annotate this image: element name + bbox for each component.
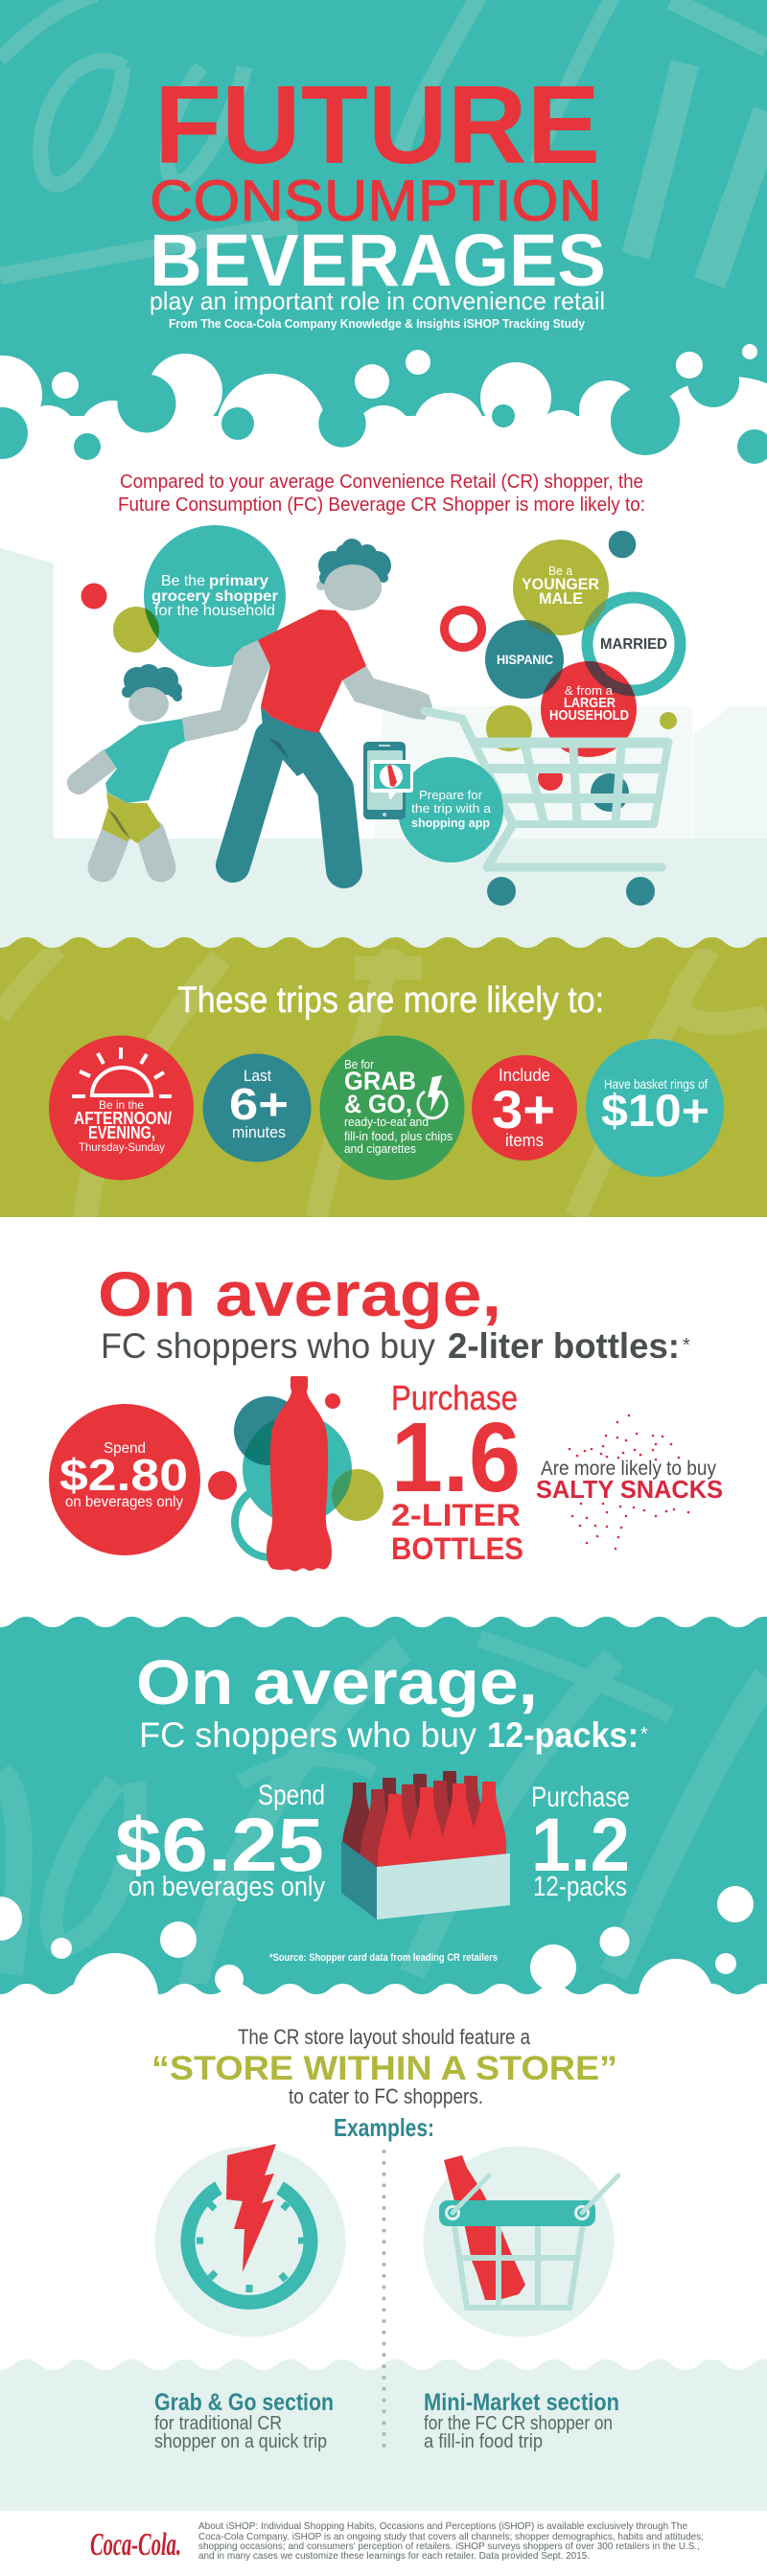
panel: shopper scene background bbox=[0, 460, 767, 949]
source note: *Source: Shopper card data from leading CR retailers bbox=[269, 1952, 498, 1964]
stat circle: afternoon evening: Be in the bbox=[99, 1098, 144, 1112]
panel: trips background bbox=[0, 937, 767, 1217]
icon: sun bbox=[72, 1047, 172, 1096]
heading: on average two liter bbox=[98, 1258, 690, 1366]
stat circle: grab and go: & GO, bbox=[344, 1090, 412, 1118]
callout: primary grocery shopper bbox=[144, 525, 286, 667]
icon: stopwatch bolt bbox=[418, 1075, 447, 1118]
heading: on average twelve packs: * bbox=[640, 1724, 648, 1745]
stat circle: afternoon evening bbox=[49, 1035, 194, 1181]
icon: twelve pack box bbox=[341, 1771, 510, 1920]
callout: larger household: & from a bbox=[565, 683, 614, 698]
panel: twelve pack background bbox=[0, 1617, 767, 1994]
stat: purchase 1.2 bbox=[531, 1782, 630, 1902]
text block: about ishop: and in many cases we customize these learnings for each retailer. Data provided Sept. 2015. bbox=[198, 2551, 590, 2562]
callout: larger household: HOUSEHOLD bbox=[549, 708, 629, 724]
text block: mini market section: a fill-in food trip bbox=[424, 2431, 543, 2452]
text block: about ishop: shopping occasions; and consumers' perception of retailers. iSHOP surveys shoppers of over 300 retailers in the U.S., bbox=[198, 2542, 700, 2552]
stat circle: ten dollars bbox=[586, 1039, 724, 1177]
callout: younger male: YOUNGER bbox=[522, 576, 599, 593]
callout: shopping app: the trip with a bbox=[411, 801, 492, 816]
stat: purchase 1.6: 2-LITER bbox=[391, 1498, 521, 1532]
stat circle: six minutes: Last bbox=[244, 1067, 271, 1085]
stat circle: afternoon evening: Thursday-Sunday bbox=[79, 1140, 165, 1154]
callout: larger household: LARGER bbox=[564, 696, 616, 711]
stat circle: three items bbox=[472, 1055, 577, 1161]
subheading: examples: Examples: bbox=[334, 2113, 434, 2142]
callout: married bbox=[587, 598, 681, 690]
title: future consumption beverages: FUTURE bbox=[154, 62, 600, 187]
heading: compared to your average: Future Consumption (FC) Beverage CR Shopper is more likely to: bbox=[118, 494, 645, 516]
heading: these trips: These trips are more likely to: bbox=[177, 980, 604, 1021]
panel: pale band bbox=[0, 2359, 767, 2511]
text block: about ishop: About iSHOP: Individual Shopping Habits, Occasions and Perceptions (iSHOP) is available exclusively through The bbox=[198, 2521, 687, 2532]
stat circle: spend 2.80: $2.80 bbox=[59, 1450, 188, 1500]
callout: primary grocery shopper: grocery shopper bbox=[151, 588, 278, 605]
stat: spend 6.25: on beverages only bbox=[128, 1872, 325, 1902]
stat: purchase 1.2: 1.2 bbox=[531, 1802, 630, 1887]
icon: stopwatch with lightning bbox=[155, 2144, 345, 2336]
text block: about ishop: Coca-Cola Company. iSHOP is an ongoing study that covers all channels; shopper demographics, habits and attitudes; bbox=[198, 2532, 704, 2542]
callout: primary grocery shopper: Be the bbox=[161, 573, 205, 589]
callout: married: MARRIED bbox=[600, 636, 667, 653]
decorative circles in cart bbox=[486, 705, 677, 812]
text block: grab and go section: Grab & Go section bbox=[154, 2389, 334, 2416]
stat circle: afternoon evening: EVENING, bbox=[88, 1123, 155, 1142]
decorative circles: left bbox=[81, 583, 159, 653]
stat circle: grab and go: GRAB bbox=[344, 1067, 416, 1095]
heading: compared to your average: Compared to your average Convenience Retail (CR) shopper, the bbox=[120, 472, 643, 493]
bubble border: teal to white bbox=[0, 1886, 767, 2043]
stat: purchase 1.2: 12-packs bbox=[533, 1872, 627, 1902]
stat circle: spend 2.80: Spend bbox=[104, 1440, 146, 1457]
heading: on average two liter: On average, bbox=[98, 1258, 501, 1329]
callout: younger male: Be a bbox=[548, 564, 572, 578]
illustration: child bbox=[79, 664, 186, 867]
illustration: shopping cart bbox=[425, 711, 668, 906]
heading: on average twelve packs: 12-packs: bbox=[487, 1715, 639, 1755]
heading: compared to your average bbox=[118, 472, 645, 516]
icon: basket with bottle bbox=[424, 2147, 618, 2336]
icon: phone with app bbox=[363, 742, 413, 819]
stat circle: ten dollars: $10+ bbox=[601, 1085, 709, 1136]
callout: primary grocery shopper: primary bbox=[209, 573, 268, 589]
stat: spend 6.25: $6.25 bbox=[115, 1802, 324, 1887]
stat circle: three items: Include bbox=[499, 1066, 550, 1085]
stat: salty snacks: SALTY SNACKS bbox=[536, 1475, 723, 1504]
divider dots bbox=[382, 2151, 385, 2456]
illustration: man bbox=[182, 539, 432, 870]
stat: spend 6.25 bbox=[115, 1780, 325, 1902]
stat: purchase 1.6: Purchase bbox=[391, 1378, 518, 1417]
heading: on average twelve packs: FC shoppers who buy bbox=[139, 1715, 476, 1755]
stat circle: grab and go: and cigarettes bbox=[344, 1141, 416, 1156]
stat circle: three items: 3+ bbox=[492, 1079, 555, 1139]
heading: store within a store: to cater to FC shoppers. bbox=[289, 2084, 483, 2108]
callout: shopping app: Prepare for bbox=[419, 788, 483, 802]
stat circle: afternoon evening: AFTERNOON/ bbox=[74, 1109, 172, 1128]
title: future consumption beverages bbox=[150, 62, 606, 302]
callout: shopping app bbox=[398, 757, 503, 862]
stat circle: grab and go bbox=[320, 1035, 464, 1181]
stat circle: six minutes: minutes bbox=[232, 1123, 286, 1141]
stat: purchase 1.6 bbox=[391, 1378, 523, 1566]
text block: grab and go section bbox=[154, 2389, 334, 2452]
heading: store within a store bbox=[151, 2025, 617, 2108]
text block: mini market section: for the FC CR shopper on bbox=[424, 2413, 613, 2434]
heading: on average two liter: * bbox=[683, 1335, 690, 1356]
title: future consumption beverages: CONSUMPTION bbox=[150, 169, 602, 233]
heading: store within a store: “STORE WITHIN A STORE” bbox=[151, 2050, 617, 2087]
stat circle: three items: items bbox=[505, 1131, 544, 1150]
text block: grab and go section: shopper on a quick trip bbox=[154, 2431, 327, 2452]
stat circle: grab and go: Be for bbox=[344, 1057, 375, 1071]
stat circle: spend 2.80: on beverages only bbox=[65, 1494, 183, 1510]
callout: larger household bbox=[541, 661, 637, 757]
logo: coca-cola: Coca-Cola. bbox=[90, 2527, 181, 2563]
heading: on average twelve packs: On average, bbox=[136, 1646, 538, 1717]
heading: on average twelve packs bbox=[136, 1646, 648, 1755]
callout: younger male: MALE bbox=[539, 590, 583, 608]
stat circle: spend 2.80 bbox=[49, 1404, 200, 1555]
stat circle: six minutes: 6+ bbox=[229, 1079, 289, 1129]
subtitle: play an important role in convenience retail bbox=[150, 287, 605, 315]
heading: on average two liter: 2-liter bottles: bbox=[448, 1326, 680, 1366]
title: future consumption beverages: BEVERAGES bbox=[150, 219, 606, 302]
source line: From The Coca-Cola Company Knowledge & Insights iSHOP Tracking Study bbox=[169, 316, 586, 331]
bubble border: header to white bbox=[0, 344, 767, 568]
panel: header background bbox=[0, 0, 767, 460]
callout: hispanic bbox=[485, 620, 564, 699]
stat: purchase 1.2: Purchase bbox=[531, 1782, 630, 1813]
stat circle: ten dollars: Have basket rings of bbox=[604, 1076, 708, 1092]
heading: store within a store: The CR store layout should feature a bbox=[238, 2025, 531, 2049]
callout: hispanic: HISPANIC bbox=[497, 652, 553, 667]
stat circle: grab and go: ready-to-eat and bbox=[344, 1115, 429, 1129]
callout: primary grocery shopper: for the household bbox=[154, 603, 275, 619]
callout: shopping app: shopping app bbox=[411, 816, 490, 830]
stat: purchase 1.6: 1.6 bbox=[391, 1402, 521, 1512]
text block: mini market section bbox=[424, 2389, 619, 2452]
text block: grab and go section: for traditional CR bbox=[154, 2413, 282, 2434]
stat: purchase 1.6: BOTTLES bbox=[391, 1531, 523, 1566]
stat circle: six minutes bbox=[203, 1054, 311, 1162]
stat: salty snacks: Are more likely to buy bbox=[541, 1458, 716, 1480]
text block: about ishop bbox=[198, 2521, 704, 2562]
stat circle: grab and go: fill-in food, plus chips bbox=[344, 1129, 453, 1143]
callout: younger male bbox=[445, 531, 636, 648]
stat: salty snacks bbox=[536, 1414, 723, 1550]
stat: spend 6.25: Spend bbox=[258, 1780, 325, 1811]
text block: mini market section: Mini-Market section bbox=[424, 2389, 619, 2416]
icon: bottle with circles bbox=[208, 1376, 384, 1572]
heading: on average two liter: FC shoppers who buy bbox=[101, 1326, 435, 1366]
